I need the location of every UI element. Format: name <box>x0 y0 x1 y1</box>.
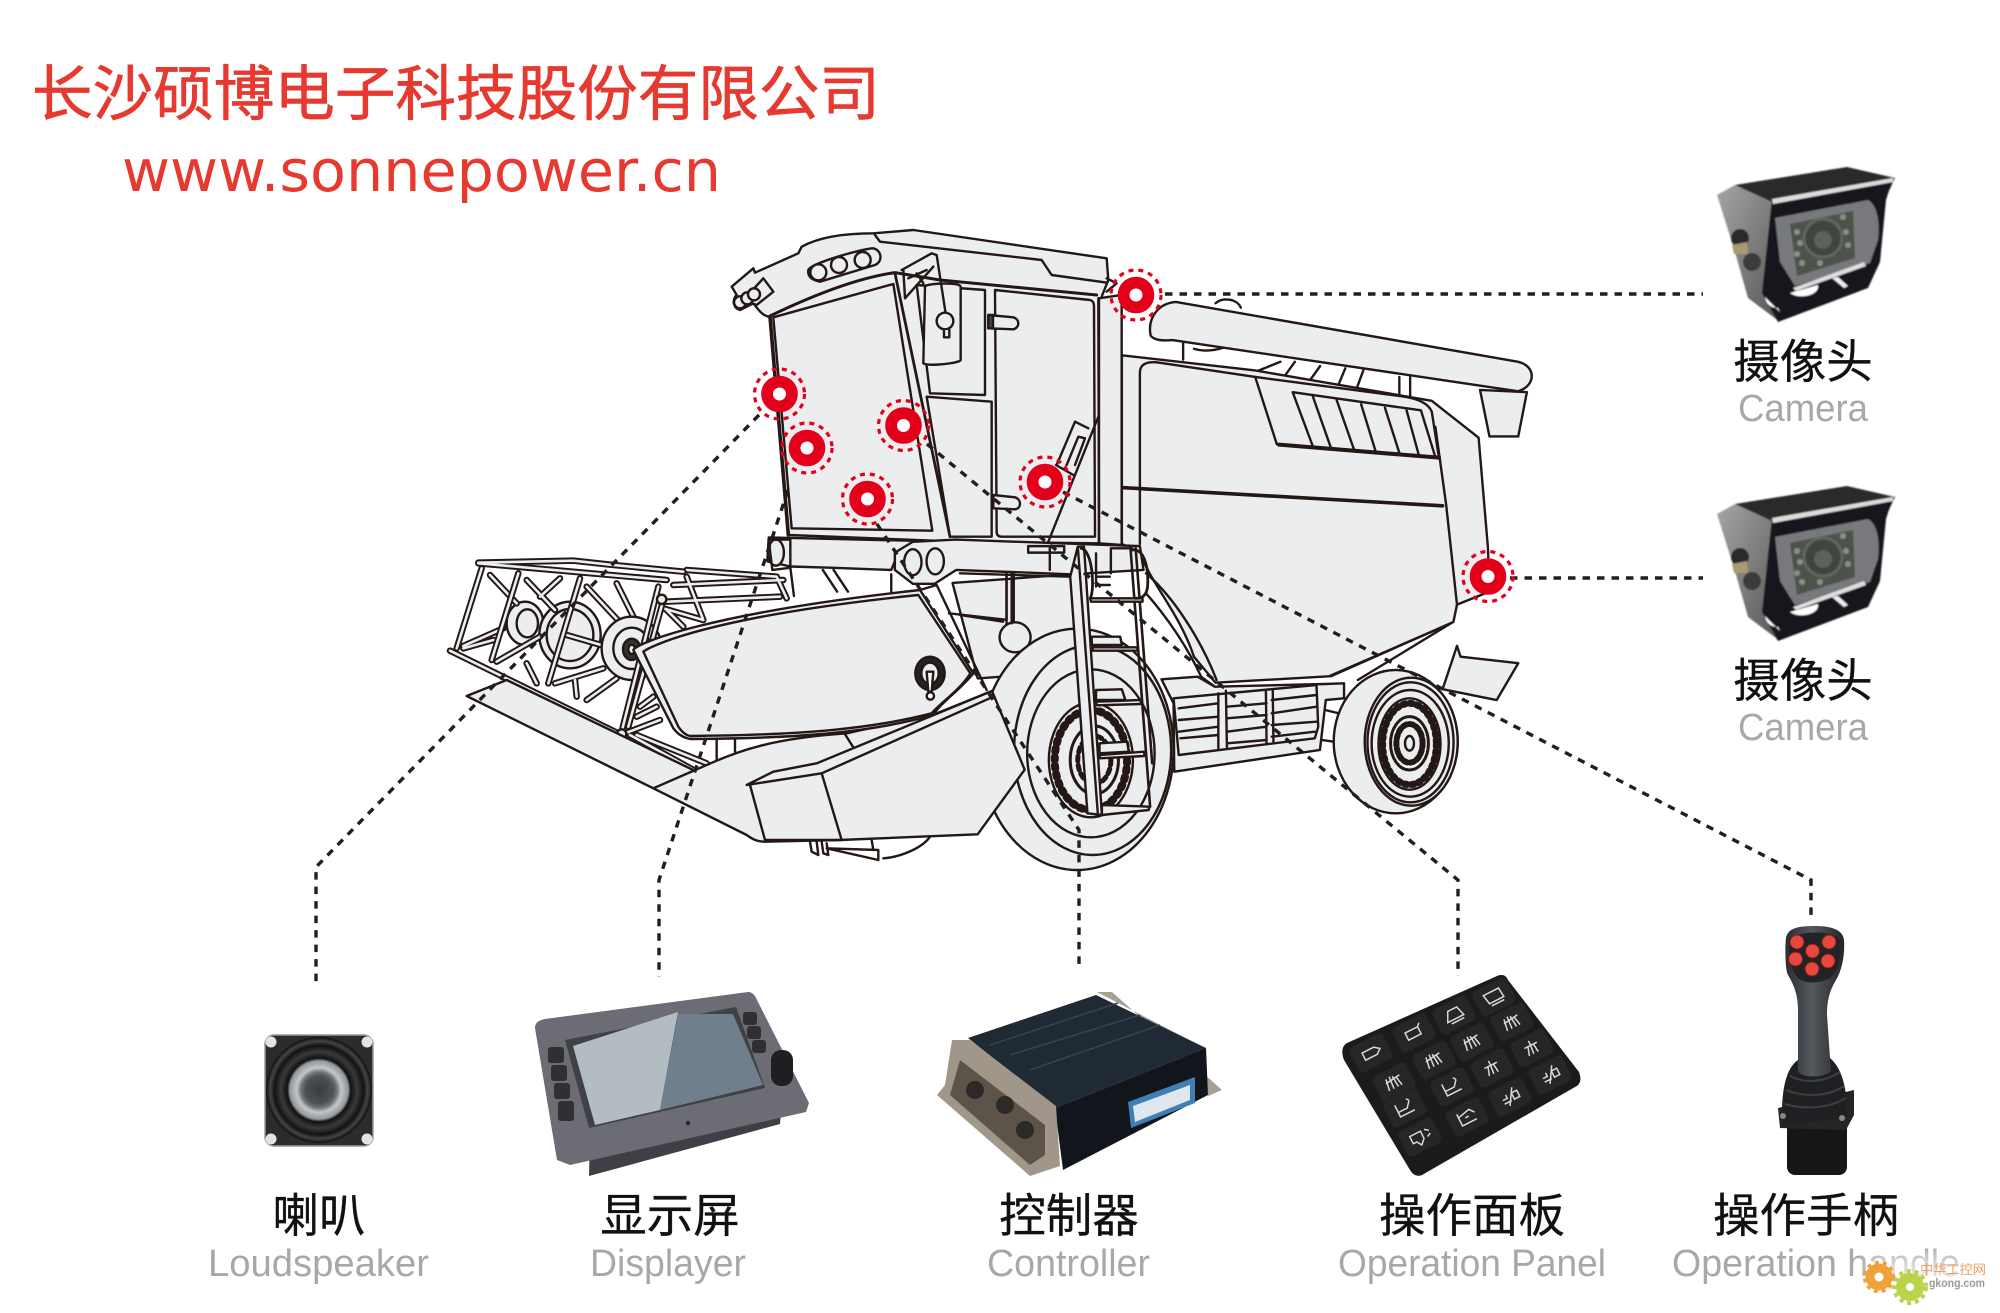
leader: loudspeaker <box>316 415 759 985</box>
sub: feeder <box>653 691 1025 842</box>
label zh: 操作手柄 <box>1713 1190 1899 1242</box>
label: loudspeaker <box>208 1190 429 1285</box>
marker <box>1463 552 1513 602</box>
label zh: 摄像头 <box>1733 655 1873 707</box>
sub: rear wheel <box>1334 670 1458 813</box>
marker <box>878 400 928 450</box>
label: operation handle <box>1672 1190 1960 1285</box>
label: controller <box>987 1190 1150 1285</box>
watermark text: 中华工控网 <box>1920 1262 1986 1277</box>
product: controller <box>937 992 1222 1176</box>
label en: Camera <box>1738 388 1869 430</box>
sub: reel discs <box>507 602 601 668</box>
label: camera top <box>1733 336 1873 430</box>
label en: Loudspeaker <box>208 1243 429 1285</box>
sub: wheels, grille and ladder <box>960 547 1458 870</box>
product: loudspeaker <box>265 1035 373 1146</box>
icon: green gear <box>1894 1271 1926 1303</box>
sub: rear body and exhaust tube <box>1122 299 1532 700</box>
leader: displayer <box>659 490 788 977</box>
sub: ladder <box>1070 547 1152 815</box>
markers: red hotspot dots <box>754 270 1513 602</box>
label zh: 喇叭 <box>272 1190 366 1242</box>
marker <box>1020 457 1070 507</box>
product: joystick handle <box>1778 926 1854 1175</box>
dashed leader lines <box>316 294 1811 985</box>
product: camera bottom <box>1717 486 1895 641</box>
marker <box>754 369 804 419</box>
sub: side shield <box>633 590 973 739</box>
label zh: 显示屏 <box>600 1190 740 1242</box>
leader: operation panel <box>927 444 1458 976</box>
product: camera top <box>1717 167 1895 322</box>
sub: front wheel <box>981 629 1174 870</box>
sub: cab <box>732 230 1122 545</box>
marker <box>782 423 832 473</box>
watermark: gkong logo <box>1864 1255 2000 1307</box>
website url: www.sonnepower.cn <box>122 137 721 205</box>
watermark url: gkong.com <box>1929 1276 1985 1290</box>
label: operation panel <box>1338 1190 1606 1285</box>
product: operation panel keypad <box>1342 975 1580 1176</box>
sub: floor <box>467 680 697 788</box>
label: displayer <box>590 1190 746 1285</box>
sub: back bars <box>463 570 787 700</box>
sub: cab base and platform <box>767 537 1143 678</box>
label en: Displayer <box>590 1243 746 1285</box>
label zh: 操作面板 <box>1379 1190 1565 1242</box>
label zh: 摄像头 <box>1733 336 1873 388</box>
label en: Operation Panel <box>1338 1243 1606 1285</box>
sub: keys <box>1348 976 1573 1158</box>
label en: Operation handle <box>1672 1243 1960 1285</box>
marker <box>1111 270 1161 320</box>
label zh: 控制器 <box>999 1190 1139 1242</box>
label: camera bottom <box>1733 655 1873 749</box>
label en: Camera <box>1738 707 1869 749</box>
label en: Controller <box>987 1243 1150 1285</box>
marker <box>842 474 892 524</box>
leader: camera 1 <box>1165 292 1703 296</box>
sub: header with reel <box>450 561 1025 860</box>
title: company name: 长沙硕博电子科技股份有限公司 <box>32 61 880 128</box>
sub: reel frame bars <box>450 561 707 772</box>
illustration: combine harvester line drawing <box>450 230 1532 870</box>
product: display <box>535 992 809 1176</box>
leader: operation handle <box>1063 492 1811 918</box>
leader: camera 2 <box>1510 576 1703 580</box>
icon: orange gear <box>1864 1262 1894 1292</box>
leader: controller <box>877 524 1079 965</box>
